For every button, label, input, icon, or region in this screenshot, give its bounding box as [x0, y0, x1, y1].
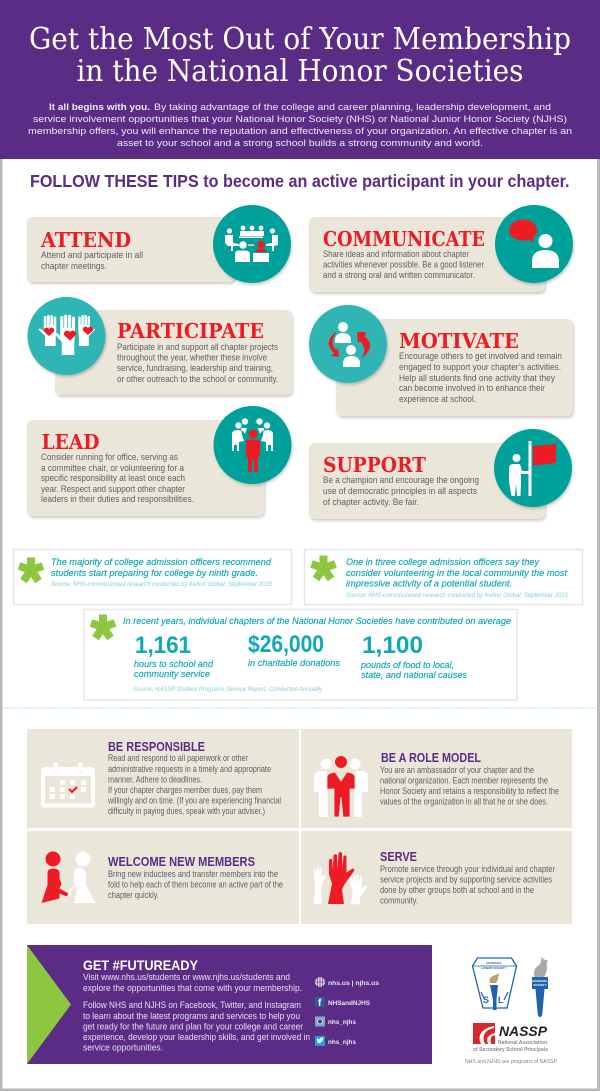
- stat: donations: in charitable donations: [248, 658, 340, 669]
- participate text: service, fundraising, leadership and training,: [117, 363, 273, 373]
- stat text: impressive activity of a potential student.: [346, 578, 512, 590]
- icon: calendar: [41, 762, 95, 808]
- be responsible heading: BE RESPONSIBLE: [108, 740, 205, 754]
- green arrow: [27, 945, 71, 1064]
- stat text: The majority of college admission officers recommend: [51, 557, 272, 568]
- icon: meeting table: [213, 205, 291, 283]
- communicate text: and a strong oral and written communicator.: [323, 270, 475, 280]
- serve text: community.: [380, 896, 418, 906]
- motivate text: engaged to support your chapter’s activities.: [399, 362, 561, 372]
- serve heading: SERVE: [380, 850, 417, 864]
- stat: hours: [134, 632, 214, 680]
- welcome text: chapter quickly.: [108, 890, 159, 900]
- logo: nassp: National Association: [498, 1040, 548, 1046]
- panel: support: [309, 429, 572, 519]
- motivate heading: MOTIVATE: [399, 329, 519, 353]
- banner text: Visit www.nhs.us/students or www.njhs.us/students and: [83, 972, 290, 982]
- logo: national junior honor society torch: SOCIETY: [533, 983, 547, 987]
- icon: raised hands with hearts: [28, 297, 106, 375]
- banner text: get ready for the future and plan for your college and career: [83, 1022, 303, 1032]
- social: instagram: nhs_njhs: [328, 1019, 356, 1026]
- role model heading: BE A ROLE MODEL: [381, 751, 481, 765]
- banner text: service opportunities.: [83, 1042, 163, 1052]
- stat: donations: [248, 631, 340, 669]
- role model text: Honor Society and retains a responsibility to reflect the: [380, 786, 559, 796]
- banner text: Follow NHS and NJHS on Facebook, Twitter, and Instagram: [83, 1000, 301, 1010]
- social: facebook: [315, 997, 371, 1009]
- banner text: [83, 972, 310, 1052]
- icon: leader with group: [214, 406, 292, 484]
- social: web: nhs.us | njhs.us: [328, 980, 379, 987]
- logo: nassp: NASSP: [499, 1023, 548, 1039]
- stat: food: state, and national causes: [361, 670, 467, 681]
- participate text: [117, 342, 278, 384]
- logo: national honor society shield: L: [498, 995, 504, 1005]
- title: in the National Honor Societies: [76, 54, 524, 89]
- communicate text: [323, 249, 484, 280]
- welcome text: Bring new inductees and transfer members into the: [108, 869, 278, 879]
- be responsible text: If your chapter charges member dues, pay them: [108, 785, 262, 795]
- attend text: Attend and participate in all: [41, 250, 143, 260]
- panel: get futureready banner: [27, 945, 432, 1064]
- social: facebook: f: [318, 998, 322, 1009]
- stat: hours: hours to school and: [134, 659, 214, 670]
- support text: of chapter activity. Be fair.: [323, 497, 419, 507]
- stat text: Source: NHS-commissioned research conducted by Kelton Global, September 2015: [51, 581, 272, 588]
- stat box: volunteering: [304, 550, 582, 604]
- icon: two people shaking hands: [42, 852, 96, 903]
- be responsible text: manner. Adhere to deadlines.: [108, 774, 202, 784]
- participate text: throughout the year, whether these involve: [117, 352, 267, 362]
- icon: raised hands: [314, 852, 368, 904]
- serve text: [380, 864, 555, 906]
- participate heading: PARTICIPATE: [117, 319, 264, 343]
- icon: speech bubble and person: [495, 205, 573, 283]
- be responsible text: willingly and on time. (If you are experiencing financial: [107, 796, 281, 806]
- role model text: national organization. Each member represents the: [380, 776, 548, 786]
- lead text: Consider running for office, serving as: [41, 452, 178, 462]
- lead text: leaders in their duties and responsibilities.: [41, 494, 194, 504]
- support heading: SUPPORT: [323, 453, 427, 477]
- social: web: [315, 977, 379, 987]
- motivate text: experience at school.: [399, 394, 476, 404]
- motivate text: Encourage others to get involved and remain: [399, 351, 562, 361]
- header banner: [0, 0, 600, 159]
- stat box: chapter contributions: [84, 610, 517, 700]
- support text: [323, 475, 479, 507]
- title: Get the Most Out of Your Membership: [29, 22, 571, 57]
- stat: donations: $26,000: [248, 631, 324, 658]
- motivate text: can become involved in to enhance their: [399, 383, 545, 393]
- intro paragraph: By taking advantage of the college and career planning, leadership development, and: [154, 101, 551, 112]
- serve text: service projects and by supporting service activities: [380, 874, 552, 884]
- lead text: [41, 452, 194, 504]
- panel: motivate: [309, 305, 573, 416]
- banner text: explore the opportunities that come with your membership.: [83, 983, 302, 993]
- be responsible text: difficulty in paying dues, speak with your adviser.): [108, 806, 265, 816]
- logo: nassp: of Secondary School Principals: [473, 1047, 548, 1053]
- logo: national honor society shield: HONOR SOCIETY: [481, 966, 507, 970]
- banner text: to learn about the latest programs and services to help you: [83, 1011, 300, 1021]
- stat: food: 1,100: [362, 632, 423, 659]
- serve text: done by other groups both at school and in the: [380, 885, 534, 895]
- role model text: [380, 765, 559, 806]
- social: facebook: NHSandNJHS: [328, 1000, 371, 1007]
- title: [29, 22, 571, 89]
- intro paragraph: membership offers, you will enhance the reputation and effectiveness of your organization. An effective chapter is an: [28, 125, 572, 136]
- logo: nassp: [473, 1023, 548, 1053]
- role model text: You are an ambassador of your chapter and the: [380, 765, 534, 775]
- banner text: experience, develop your leadership skills, and get involved in: [83, 1032, 310, 1042]
- support text: Be a champion and encourage the ongoing: [323, 475, 479, 485]
- social: instagram: [315, 1016, 356, 1026]
- support text: use of democratic principles in all aspects: [323, 486, 477, 496]
- panel: be a role model: [301, 729, 572, 828]
- panel: attend: [27, 205, 291, 283]
- source note: Source: NASSP Student Programs Service Report, Conducted Annually: [133, 686, 323, 693]
- stat text: One in three college admission officers say they: [346, 557, 540, 568]
- stat: hours: 1,161: [135, 632, 191, 659]
- be responsible text: Read and respond to all paperwork or other: [108, 753, 248, 763]
- panel: participate: [28, 297, 292, 395]
- role model text: values of the organization in all that he or she does.: [380, 796, 548, 806]
- communicate heading: COMMUNICATE: [323, 227, 485, 251]
- logo: national honor society shield: [472, 958, 516, 1010]
- panel: serve: [301, 831, 572, 924]
- stat box: ninth grade: [14, 550, 292, 604]
- welcome text: [108, 869, 283, 900]
- stat text: Source: NHS-commissioned research conducted by Kelton Global, September 2015: [346, 592, 568, 599]
- panel: communicate: [309, 205, 573, 292]
- lead text: specific responsibility at least once each: [41, 473, 185, 483]
- intro paragraph: It all begins with you.: [49, 101, 150, 112]
- stat: food: [360, 632, 467, 681]
- logo: national junior honor society torch: NATIONAL: [532, 979, 548, 983]
- be responsible text: administrative requests in a timely and appropriate: [108, 764, 271, 774]
- icon: person with flag: [494, 429, 572, 507]
- communicate text: Share ideas and information about chapter: [323, 249, 469, 259]
- serve text: Promote service through your individual and chapter: [380, 864, 555, 874]
- motivate text: [399, 351, 562, 404]
- stat text: [346, 557, 568, 599]
- be responsible text: [107, 753, 281, 816]
- stat: food: pounds of food to local,: [360, 660, 454, 671]
- icon: green asterisk: [312, 556, 336, 579]
- participate text: Participate in and support all chapter projects: [117, 342, 278, 352]
- attend text: [41, 250, 143, 271]
- stat text: [51, 557, 272, 588]
- stat text: consider volunteering in the local community the most: [346, 568, 567, 579]
- participate text: or other outreach to the school or community.: [117, 374, 278, 384]
- logo: national honor society shield: S: [483, 995, 489, 1005]
- logo: national junior honor society torch: [532, 957, 548, 1017]
- lead text: a committee chair, or volunteering for a: [41, 463, 185, 473]
- social: twitter: nhs_njhs: [328, 1039, 356, 1046]
- motivate text: Help all students find one activity that they: [399, 373, 555, 383]
- icon: green asterisk: [91, 614, 115, 638]
- intro paragraph: service involvement opportunities that your National Honor Society (NHS) or National Junior Honor Society (NJHS): [33, 113, 567, 124]
- lead heading: LEAD: [42, 430, 100, 454]
- intro paragraph: [28, 101, 572, 148]
- attend text: chapter meetings.: [41, 261, 107, 271]
- tips heading: FOLLOW THESE TIPS to become an active participant in your chapter.: [30, 171, 570, 191]
- banner heading: GET #FUTUREADY: [83, 957, 199, 973]
- icon: green asterisk: [19, 558, 43, 581]
- panel: be responsible: [27, 729, 299, 828]
- communicate text: activities whenever possible. Be a good listener: [323, 260, 484, 270]
- lead text: year. Respect and support other chapter: [41, 484, 185, 494]
- attend heading: ATTEND: [40, 228, 131, 252]
- contributions headline: In recent years, individual chapters of the National Honor Societies have contributed on average: [123, 616, 511, 627]
- intro paragraph: asset to your school and a strong school builds a strong community and world.: [117, 137, 483, 148]
- icon: people with circular arrows: [309, 305, 387, 383]
- logo note: NHS and NJHS are programs of NASSP: [465, 1059, 557, 1065]
- welcome heading: WELCOME NEW MEMBERS: [108, 855, 255, 869]
- panel: welcome new members: [27, 831, 299, 924]
- icon: role model figures: [314, 756, 368, 817]
- stat: hours: community service: [134, 669, 210, 680]
- welcome text: fold to help each of them become an active part of the: [108, 880, 283, 890]
- stat text: students start preparing for college by ninth grade.: [51, 568, 258, 579]
- social: twitter: [315, 1036, 356, 1046]
- panel: lead: [27, 406, 292, 516]
- logo: national honor society shield: NATIONAL: [486, 961, 502, 965]
